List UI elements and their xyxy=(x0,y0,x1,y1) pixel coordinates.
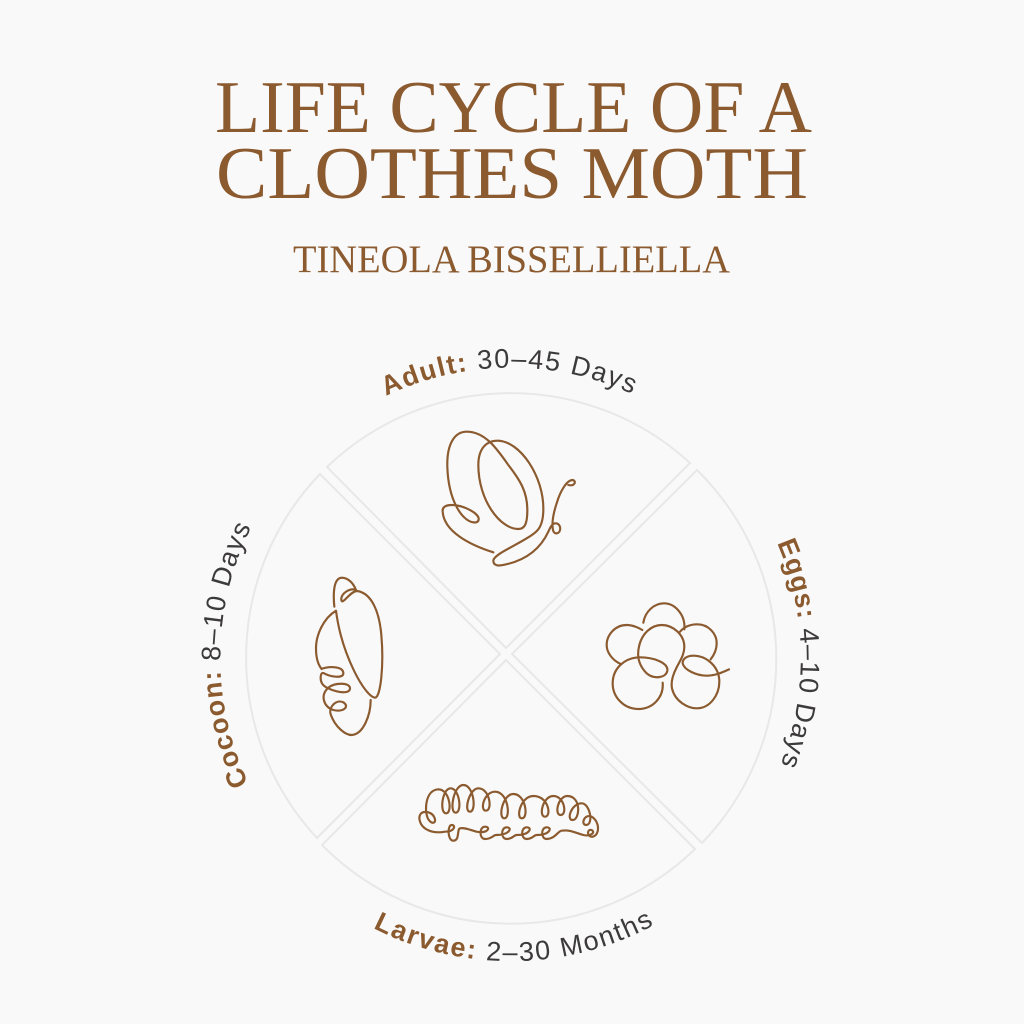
cycle diagram xyxy=(246,393,776,924)
subtitle: TINEOLA BISSELLIELLA xyxy=(293,238,730,281)
title: LIFE CYCLE OF A xyxy=(215,67,812,149)
panel: cocoon sector xyxy=(246,474,500,838)
icon: eggs xyxy=(607,603,729,709)
label: larvae: Larvae: 2–30 Months xyxy=(374,912,652,961)
title xyxy=(215,67,812,215)
label: adult: Adult: 30–45 Days xyxy=(385,348,636,396)
panel: adult sector xyxy=(327,393,690,648)
panel: larvae sector xyxy=(322,660,695,924)
panel: eggs sector xyxy=(512,470,776,843)
icon: moth xyxy=(443,432,575,566)
icon: cocoon xyxy=(316,578,382,735)
label: eggs: Eggs: 4–10 Days xyxy=(778,538,820,768)
title: CLOTHES MOTH xyxy=(216,133,808,215)
icon: larva xyxy=(419,785,598,841)
label: cocoon: Cocoon: 8–10 Days xyxy=(202,523,250,788)
